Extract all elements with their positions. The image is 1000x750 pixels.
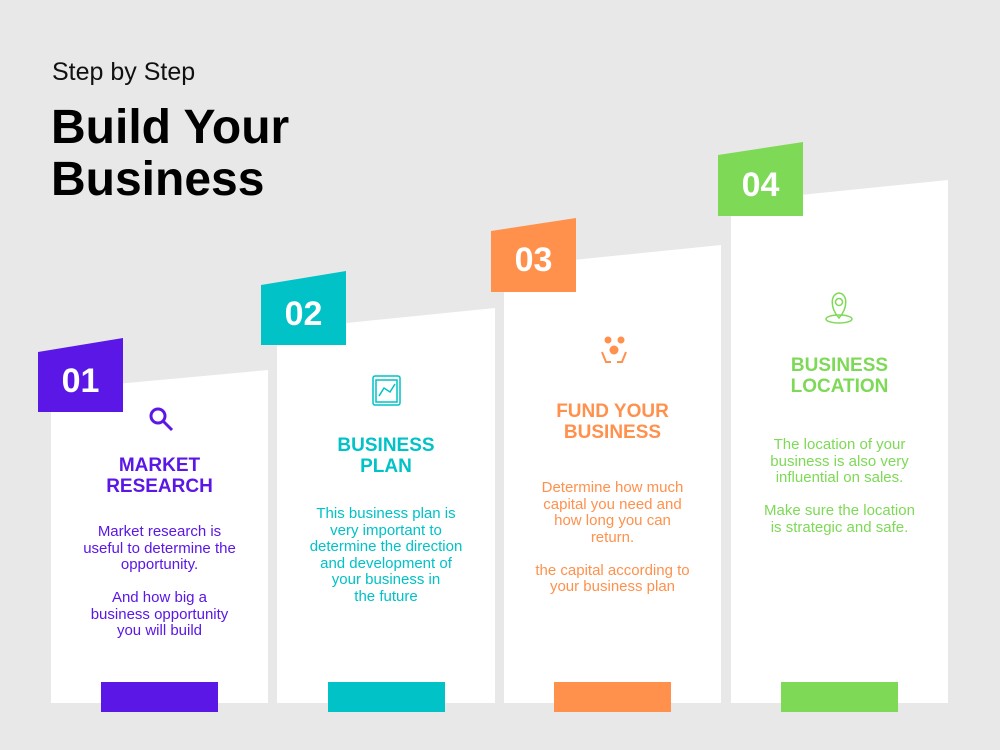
heading 3: BUSINESS — [564, 422, 661, 443]
text 1: Market research is — [98, 523, 221, 540]
heading 4: BUSINESS — [791, 355, 888, 376]
text 2: your business in — [332, 571, 440, 588]
text 4: influential on sales. — [776, 469, 903, 486]
heading 4: LOCATION — [791, 376, 888, 397]
text 4: is strategic and safe. — [771, 518, 908, 536]
text 2: very important to — [330, 522, 442, 538]
title: Business — [51, 153, 264, 206]
heading 3: FUND YOUR — [556, 401, 669, 422]
text 4: Make sure the location — [764, 502, 915, 519]
card 2 — [261, 271, 495, 712]
text 3: the capital according to — [535, 562, 690, 578]
text 1: opportunity. — [121, 556, 198, 573]
text 2 — [310, 505, 462, 604]
text 4 — [764, 436, 915, 536]
heading 2: PLAN — [360, 456, 412, 477]
number 01: 01 — [62, 362, 99, 400]
text 4: business is also very — [770, 452, 909, 470]
icon: magnifier — [151, 409, 172, 430]
text 1 — [83, 523, 236, 639]
card 1 — [38, 338, 268, 712]
heading 2: BUSINESS — [337, 435, 435, 456]
text 3: return. — [591, 528, 634, 546]
heading 2 — [337, 435, 435, 477]
text 1: And how big a — [112, 589, 207, 606]
icon: money hands — [602, 336, 626, 362]
text 2: This business plan is — [316, 505, 456, 522]
card 4 — [718, 142, 948, 712]
text 1: useful to determine the — [83, 540, 236, 556]
icon: clipboard chart — [373, 376, 400, 405]
text 2: and development of — [320, 554, 452, 572]
title: Build Your — [51, 101, 289, 154]
text 2: the future — [354, 588, 418, 604]
heading 3 — [556, 401, 669, 443]
text 4: The location of your — [774, 436, 905, 453]
subtitle: Step by Step — [52, 58, 195, 86]
heading 1: RESEARCH — [106, 476, 213, 497]
number 02: 02 — [285, 295, 322, 333]
text 3: your business plan — [550, 578, 675, 595]
text 2: determine the direction — [310, 538, 462, 555]
text 3: Determine how much — [542, 479, 683, 496]
text 3: capital you need and — [543, 496, 682, 512]
number 04: 04 — [742, 166, 779, 204]
title — [51, 101, 289, 206]
text 1: you will build — [117, 622, 202, 639]
number 03: 03 — [515, 241, 552, 279]
text 3: how long you can — [554, 512, 671, 529]
heading 1: MARKET — [119, 455, 200, 476]
icon: location pin — [826, 293, 852, 323]
heading 1 — [106, 455, 213, 497]
card 3 — [491, 218, 721, 712]
heading 4 — [791, 355, 888, 397]
text 3 — [535, 479, 690, 595]
text 1: business opportunity — [91, 606, 228, 622]
